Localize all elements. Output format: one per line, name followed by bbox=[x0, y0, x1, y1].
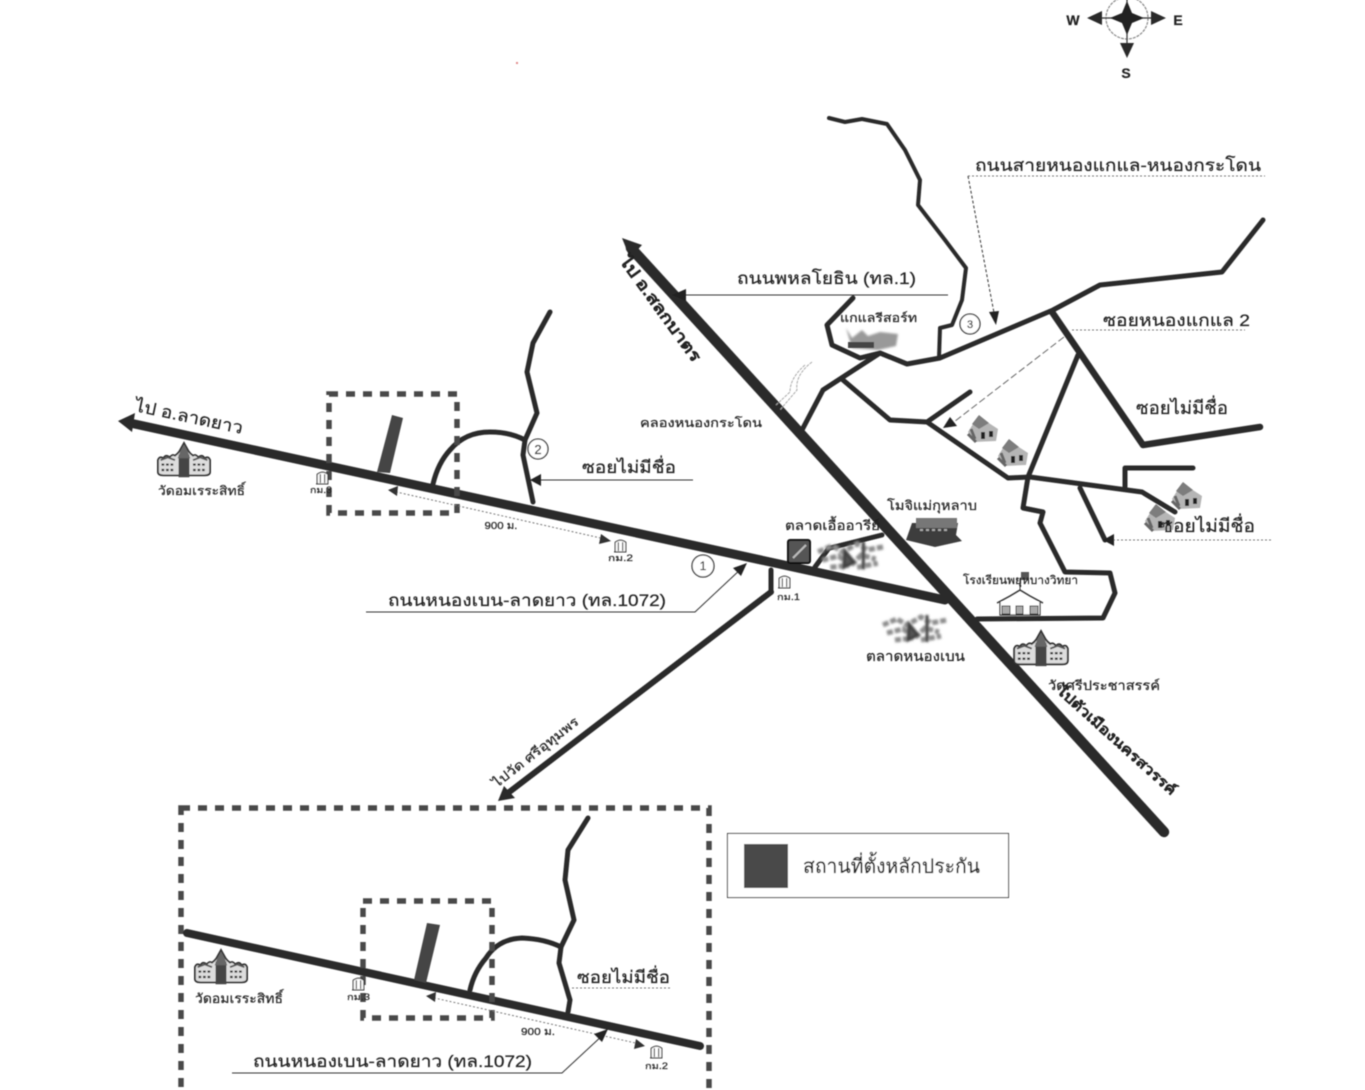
direction label: to Lat Yao: ไป อ.ลาดยาว bbox=[131, 395, 245, 438]
label: Nong Ben - Lat Yao road: ถนนหนองเบน-ลาดยาว (ทล.1072) bbox=[388, 591, 666, 610]
km markers: กม.2 bbox=[608, 553, 633, 563]
main road: Nong Ben - Lat Yao bbox=[118, 413, 945, 600]
resort icon and label bbox=[840, 311, 917, 350]
road network east bbox=[802, 118, 1263, 619]
road network west bbox=[433, 312, 550, 502]
inset label unnamed soi: ซอยไม่มีชื่อ bbox=[577, 965, 670, 987]
label: Nong Ben - Lat Yao road bbox=[366, 563, 747, 612]
inset km markers bbox=[347, 978, 668, 1071]
creek bbox=[776, 362, 812, 410]
inset dashed site box bbox=[363, 901, 492, 1018]
road to Wat Si Uthumphon bbox=[498, 570, 771, 801]
label: Nong Kae Lae road: ถนนสายหนองแกแล-หนองกระโดน bbox=[975, 155, 1261, 175]
label: Uea Ari market: ตลาดเอื้ออารีย์ bbox=[785, 516, 880, 533]
compass: S bbox=[1121, 65, 1131, 81]
label: unnamed soi 2: ซอยไม่มีชื่อ bbox=[1160, 513, 1255, 536]
km markers: กม.3 bbox=[310, 485, 332, 495]
inset label road bbox=[232, 1029, 608, 1073]
label: Soi Nong Kae Lae 2: ซอยหนองแกแล 2 bbox=[1103, 311, 1250, 330]
compass: E bbox=[1173, 12, 1183, 28]
inset site block bbox=[414, 923, 440, 983]
temple icon west bbox=[158, 443, 247, 498]
Nong Ben market icon and label bbox=[866, 615, 965, 664]
inset label road: ถนนหนองเบน-ลาดยาว (ทล.1072) bbox=[253, 1052, 532, 1071]
inset main road bbox=[187, 933, 700, 1046]
inset distance arrow: 900 ม. bbox=[521, 1027, 555, 1038]
km markers bbox=[310, 472, 800, 602]
label: Mochi Mae Kulap: โมจิแม่กุหลาบ bbox=[887, 498, 977, 514]
legend: สถานที่ตั้งหลักประกัน bbox=[803, 852, 980, 878]
direction label: to Sukhothai road: ไป อ.สลกบาตร bbox=[614, 250, 705, 366]
distance arrow 900 m: 900 ม. bbox=[484, 521, 518, 532]
label: Soi Nong Kae Lae 2 bbox=[943, 311, 1250, 428]
compass: W bbox=[1066, 12, 1080, 28]
label: Nong Kae Lae road bbox=[968, 155, 1265, 325]
distance arrow 900 m bbox=[388, 486, 611, 544]
direction label: to Wat Si Uthumphon: ไปวัด ศรีอุทุมพร bbox=[489, 714, 582, 792]
label: canal: คลองหนองกระโดน bbox=[640, 416, 762, 430]
inset panel bbox=[181, 808, 709, 1090]
Wat Si Prachasan icon and label: วัดศรีประชาสรรค์ bbox=[1048, 678, 1160, 693]
label: Phahonyothin road bbox=[672, 268, 948, 301]
circled number 2: 2 bbox=[534, 442, 542, 457]
inset km markers: กม.2 bbox=[645, 1061, 668, 1071]
label: Phahonyothin road: ถนนพหลโยธิน (ทล.1) bbox=[737, 268, 916, 288]
circled number 1 bbox=[692, 555, 714, 577]
resort icon and label: แกแลรีสอร์ท bbox=[840, 311, 917, 325]
school icon and label: โรงเรียนพยุหบางวิทยา bbox=[963, 573, 1078, 587]
temple icon west: วัดอมเรระสิทธิ์ bbox=[158, 481, 247, 498]
main road: Phahonyothin diagonal bbox=[622, 238, 1164, 832]
inset temple bbox=[195, 950, 285, 1006]
Nong Ben market icon and label: ตลาดหนองเบน bbox=[866, 648, 965, 664]
inset temple: วัดอมเรระสิทธิ์ bbox=[195, 989, 285, 1006]
scan specks bbox=[516, 62, 518, 64]
label: Mochi Mae Kulap bbox=[887, 498, 977, 547]
direction label: to Nakhon Sawan: ไปตัวเมืองนครสวรรค์ bbox=[1052, 680, 1181, 798]
label: Uea Ari market bbox=[785, 516, 884, 569]
inset km markers: กม.3 bbox=[347, 992, 370, 1002]
compass bbox=[1066, 0, 1183, 81]
circled number 3 bbox=[960, 314, 980, 334]
houses bbox=[968, 415, 1202, 531]
label: unnamed soi west: ซอยไม่มีชื่อ bbox=[582, 455, 676, 477]
inset side roads bbox=[470, 818, 588, 1012]
legend bbox=[728, 834, 1008, 898]
inset distance arrow bbox=[426, 992, 645, 1049]
dashed site box bbox=[329, 394, 457, 513]
label: unnamed soi west bbox=[530, 455, 693, 486]
circled number 3: 3 bbox=[967, 319, 973, 331]
circled number 1: 1 bbox=[700, 559, 707, 573]
school icon and label bbox=[963, 572, 1078, 615]
Wat Si Prachasan icon and label bbox=[1014, 631, 1160, 693]
km markers: กม.1 bbox=[777, 592, 800, 602]
label: unnamed soi 2 bbox=[1103, 513, 1272, 546]
circled number 2 bbox=[528, 439, 548, 459]
site block bbox=[377, 415, 403, 473]
label: unnamed soi 1: ซอยไม่มีชื่อ bbox=[1136, 395, 1228, 418]
